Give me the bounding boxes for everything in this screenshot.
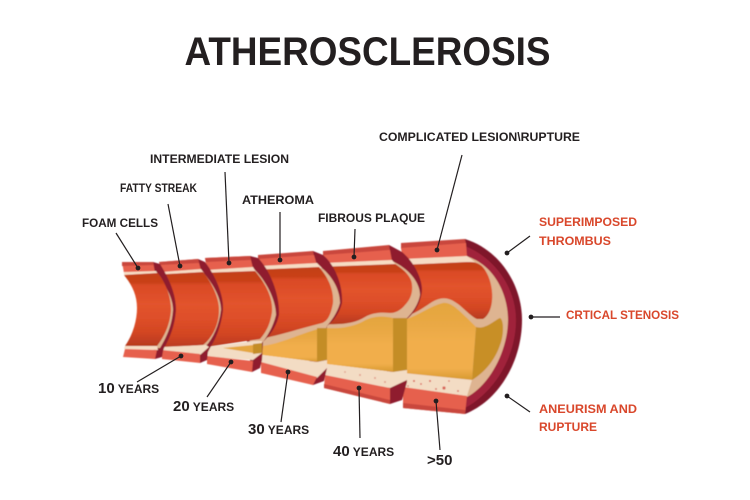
complication labels: THROMBUS: [539, 236, 611, 248]
segment 3: intermediate lesion: [200, 256, 279, 372]
age labels: [98, 380, 452, 469]
age labels: 40 YEARS: [333, 443, 394, 460]
stage labels: INTERMEDIATE LESION: [150, 154, 289, 166]
age labels: >50: [427, 452, 452, 469]
age labels: 10 YEARS: [98, 380, 159, 397]
segment 2: fatty streak: [150, 259, 223, 363]
stage labels: COMPLICATED LESION\RUPTURE: [379, 132, 580, 144]
segment 4: atheroma: [250, 251, 342, 385]
complication labels: CRTICAL STENOSIS: [566, 310, 679, 322]
plaque speckles: [407, 380, 459, 392]
complication labels: ANEURISM AND: [539, 404, 637, 416]
stage labels: FIBROUS PLAQUE: [318, 213, 425, 225]
age labels: 20 YEARS: [173, 398, 234, 415]
complication labels: [539, 217, 679, 434]
segment 1: foam cells: [122, 262, 176, 359]
age labels: 30 YEARS: [248, 421, 309, 438]
leader lines: [116, 155, 560, 450]
complication labels: SUPERIMPOSED: [539, 217, 637, 229]
stage labels: [82, 132, 580, 230]
complication labels: RUPTURE: [539, 422, 597, 434]
title: ATHEROSCLEROSIS: [184, 30, 550, 74]
segment 5: fibrous plaque: [318, 245, 422, 404]
artery illustration: [122, 239, 522, 414]
stage labels: FOAM CELLS: [82, 218, 158, 230]
stage labels: ATHEROMA: [242, 195, 314, 207]
stage labels: FATTY STREAK: [120, 183, 198, 195]
segment 6: complicated lesion: [400, 239, 522, 414]
